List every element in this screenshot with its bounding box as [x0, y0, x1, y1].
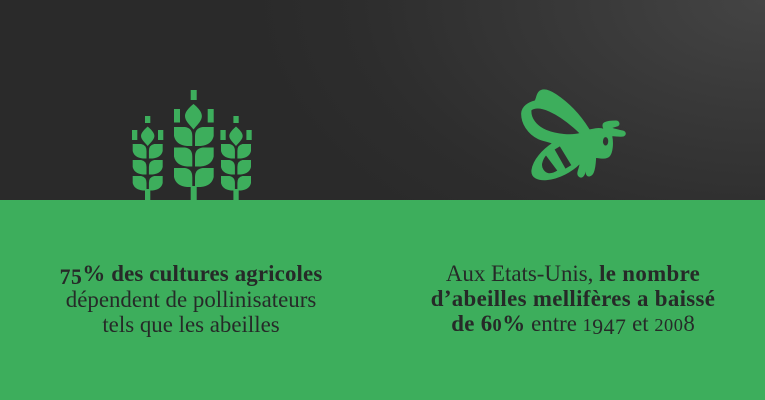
text block: cultures agricoles: 75% des cultures agricoles: [60, 261, 322, 288]
left wheat stalk: [132, 116, 163, 200]
text block: abeilles mellifères: d’abeilles mellifères a baissé: [431, 286, 715, 311]
right wheat stalk: [220, 116, 252, 200]
text block: abeilles mellifères: [431, 261, 715, 338]
text block: cultures agricoles: dépendent de pollinisateurs: [66, 287, 316, 312]
text block: cultures agricoles: tels que les abeilles: [102, 312, 280, 337]
text block: cultures agricoles: [60, 261, 322, 337]
text block: abeilles mellifères: Aux Etats-Unis, le nombre: [446, 261, 700, 286]
text block: abeilles mellifères: de 60% entre 1947 et 2008: [451, 311, 695, 338]
dark upper panel: [0, 0, 765, 200]
centre wheat stalk: [174, 90, 214, 200]
icon: bee: [522, 90, 625, 180]
green lower panel: [0, 200, 765, 400]
